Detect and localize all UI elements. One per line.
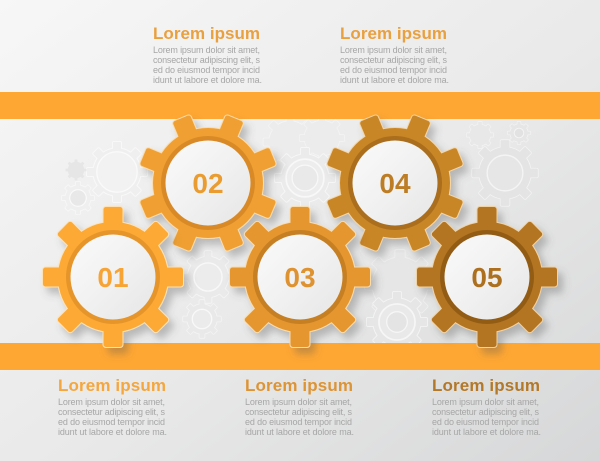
text block: bottom 1: idunt ut labore et dolore ma. xyxy=(58,427,167,437)
text block: top 1: idunt ut labore et dolore ma. xyxy=(153,75,262,85)
text block: bottom 2: consectetur adipiscing elit, s xyxy=(245,407,352,417)
text block: top 2: ed do eiusmod tempor incid xyxy=(340,65,447,75)
number 02: 02 xyxy=(192,168,224,199)
gear 03 xyxy=(230,207,370,347)
text block: top 1: Lorem ipsum dolor sit amet, xyxy=(153,45,260,55)
text block: bottom 3: ed do eiusmod tempor incid xyxy=(432,417,539,427)
text block: top 2: idunt ut labore et dolore ma. xyxy=(340,75,449,85)
gear: background lower A xyxy=(182,251,234,303)
text block: bottom 3: Lorem ipsum dolor sit amet, xyxy=(432,397,539,407)
text block: bottom 1: Lorem ipsum dolor sit amet, xyxy=(58,397,165,407)
text block: top 1 xyxy=(153,24,262,85)
text block: bottom 2 xyxy=(245,376,354,437)
number 01: 01 xyxy=(97,262,129,293)
text block: bottom 3: Lorem ipsum xyxy=(432,376,540,395)
gear 01 xyxy=(43,207,183,347)
gear: background left tiny xyxy=(66,160,86,180)
text block: bottom 2: ed do eiusmod tempor incid xyxy=(245,417,352,427)
gear: background centre upper left xyxy=(263,115,317,169)
text block: bottom 3 xyxy=(432,376,541,437)
number 04: 04 xyxy=(379,168,411,199)
text block: top 1: consectetur adipiscing elit, s xyxy=(153,55,260,65)
band: bottom xyxy=(0,343,600,370)
text block: bottom 3: consectetur adipiscing elit, s xyxy=(432,407,540,417)
number 03: 03 xyxy=(284,262,316,293)
gear: background left small xyxy=(62,182,94,214)
text block: bottom 2: Lorem ipsum xyxy=(245,376,353,395)
text block: top 2 xyxy=(340,24,449,85)
gear: background left large xyxy=(87,142,147,202)
text block: bottom 1 xyxy=(58,376,167,437)
gear 02 xyxy=(117,92,299,274)
gear 04 xyxy=(304,92,486,274)
gear: background right small B xyxy=(508,122,530,144)
text block: bottom 2: idunt ut labore et dolore ma. xyxy=(245,427,354,437)
text block: top 1: ed do eiusmod tempor incid xyxy=(153,65,260,75)
text block: top 2: Lorem ipsum xyxy=(340,24,447,43)
text block: top 2: Lorem ipsum dolor sit amet, xyxy=(340,45,447,55)
band: top xyxy=(0,92,600,119)
gear: background right large xyxy=(472,140,538,206)
gear: background right small A xyxy=(467,122,493,148)
gear: background lower D xyxy=(367,292,427,352)
gear: background lower B xyxy=(183,300,221,338)
text block: bottom 1: ed do eiusmod tempor incid xyxy=(58,417,165,427)
text block: bottom 2: Lorem ipsum dolor sit amet, xyxy=(245,397,352,407)
gear: background lower C xyxy=(365,250,435,320)
text block: bottom 1: Lorem ipsum xyxy=(58,376,166,395)
gear: background centre upper right xyxy=(300,116,344,160)
background gears xyxy=(62,115,538,352)
text block: bottom 1: consectetur adipiscing elit, s xyxy=(58,407,166,417)
text block: bottom 3: idunt ut labore et dolore ma. xyxy=(432,427,541,437)
number 05: 05 xyxy=(471,262,503,293)
text block: top 2: consectetur adipiscing elit, s xyxy=(340,55,448,65)
gear 05 xyxy=(417,207,557,347)
text block: top 1: Lorem ipsum xyxy=(153,24,260,43)
gear: background centre xyxy=(275,148,335,208)
